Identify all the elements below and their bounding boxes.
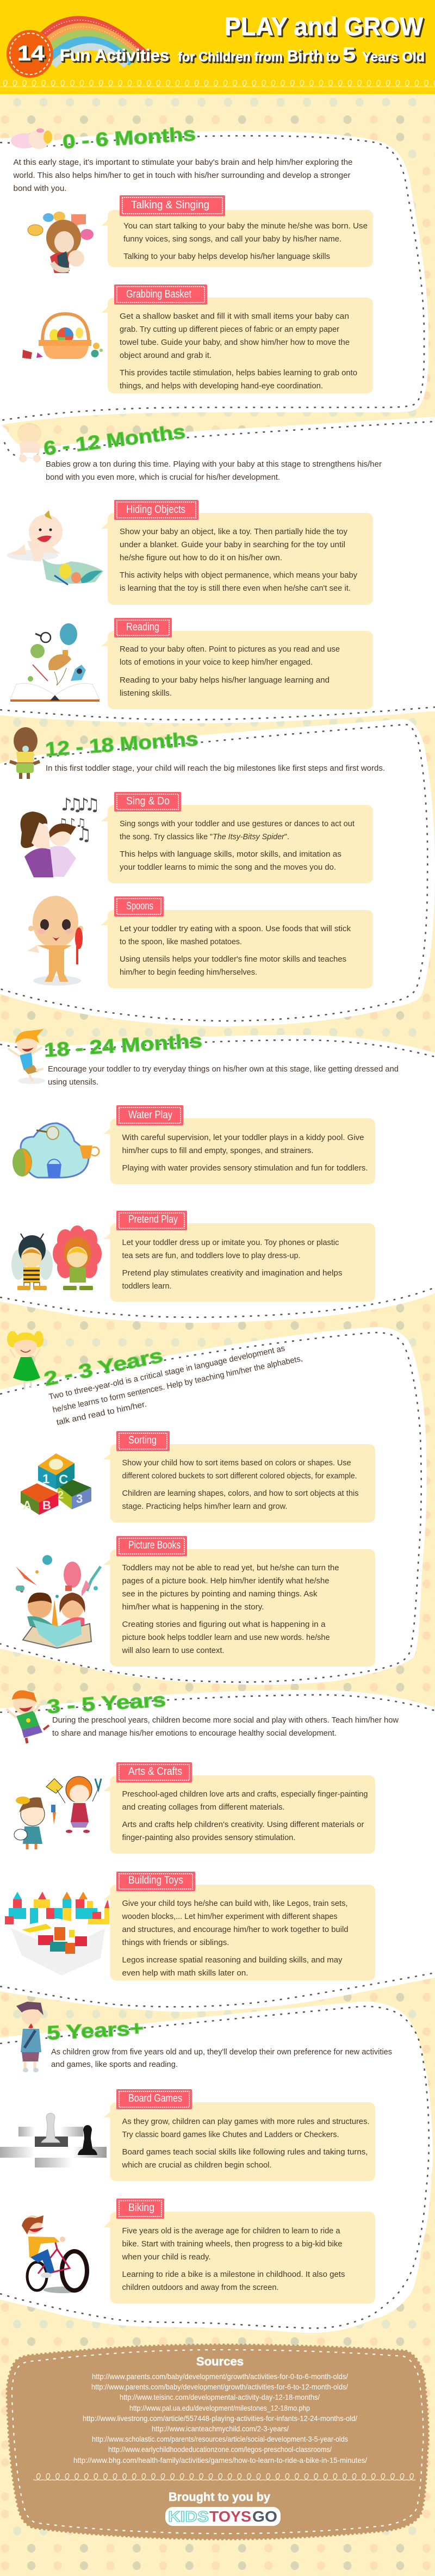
card text: and structures, and encourage him/her to work together to build bbox=[122, 1925, 348, 1934]
card text: Five years old is the average age for children to learn to ride a bbox=[122, 2226, 340, 2236]
intro text bbox=[46, 460, 382, 482]
icon: children in bee and flower costumes bbox=[11, 1225, 102, 1290]
card text bbox=[122, 1789, 368, 1842]
badge: 14 bbox=[7, 30, 53, 78]
card text bbox=[123, 221, 368, 261]
tag: Grabbing Basket bbox=[126, 288, 191, 300]
card text: wooden blocks,... Let him/her experiment with different shapes bbox=[122, 1912, 338, 1921]
card text: is learning that the toy is still there even when he/she can't see it. bbox=[120, 584, 351, 593]
card text: Board games teach social skills like following rules and taking turns, bbox=[122, 2147, 368, 2157]
source links: http://www.livestrong.com/article/557448-playing-activities-for-infants-12-24-months-old/ bbox=[83, 2414, 357, 2423]
card text: Pretend play stimulates creativity and imagination and helps bbox=[122, 1268, 343, 1278]
card: Board Games bbox=[103, 2089, 375, 2181]
logo: KidsToysGo: GO bbox=[252, 2508, 277, 2525]
source links bbox=[73, 2372, 367, 2464]
card: Arts & Crafts bbox=[103, 1762, 375, 1854]
card text: funny voices, sing songs, and call your baby by his/her name. bbox=[123, 234, 341, 244]
tag: Talking & Singing bbox=[131, 199, 209, 211]
icon: alphabet blocks: 3 bbox=[76, 1492, 83, 1506]
tag: Board Games bbox=[128, 2092, 182, 2104]
tag bbox=[120, 195, 225, 216]
intro text: Encourage your toddler to try everyday things on his/her own at this stage, like getting dressed and bbox=[48, 1064, 399, 1074]
card text: lots of emotions in your voice to keep him/her engaged. bbox=[120, 658, 313, 667]
icon: alphabet blocks: C bbox=[59, 1472, 68, 1487]
subtitle: to bbox=[326, 49, 339, 65]
subtitle: Fun Activities bbox=[60, 46, 169, 65]
card text: Reading to your baby helps his/her language learning and bbox=[120, 676, 330, 685]
intro text bbox=[48, 1064, 399, 1087]
icon: alphabet blocks: B bbox=[42, 1498, 51, 1512]
card text: your toddler learns to mimic the song and the moves you do. bbox=[120, 863, 336, 872]
card text: things with friends or siblings. bbox=[122, 1938, 229, 1947]
intro text: During the preschool years, children become more social and play with others. Teach him/her how bbox=[52, 1716, 399, 1725]
tag bbox=[116, 1105, 183, 1125]
card: Sorting bbox=[103, 1431, 375, 1522]
intro text: he/she learns to form sentences. Help by teaching him/her the alphabets, bbox=[52, 1354, 303, 1415]
heading: 2 - 3 Years: 2 - 3 Years bbox=[42, 1344, 165, 1390]
icon: mother and child singing with notes: ♫ bbox=[76, 824, 92, 845]
tag: Biking bbox=[128, 2202, 154, 2214]
icon: crawling baby with hidden toys bbox=[7, 510, 103, 585]
card text: This provides tactile stimulation, helps babies learning to grab onto bbox=[120, 368, 357, 377]
icon: alphabet blocks: 1 bbox=[42, 1472, 49, 1487]
card text: when your child is ready. bbox=[122, 2252, 211, 2262]
card text bbox=[120, 819, 355, 872]
card text: him/her cups to fill and empty, sponges, and strainers. bbox=[122, 1146, 313, 1155]
icon: mother and child singing with notes bbox=[21, 794, 100, 877]
card: Building Toys bbox=[103, 1872, 375, 1980]
source links: http://www.scholastic.com/parents/resources/article/social-development-3-5-year-olds bbox=[92, 2435, 348, 2443]
card text bbox=[122, 1563, 339, 1655]
intro text: bond with you even more, which is crucial for his/her development. bbox=[46, 473, 280, 482]
card text: Playing with water provides sensory stimulation and fun for toddlers. bbox=[122, 1163, 368, 1173]
section: 0 - 6 Months bbox=[11, 122, 373, 393]
card text: toddlers learn. bbox=[122, 1281, 172, 1291]
section: 2 - 3 Years bbox=[7, 1331, 375, 1667]
heading: 0 - 6 Months: 0 - 6 Months bbox=[62, 122, 196, 153]
section: 18 - 24 Months bbox=[8, 1029, 399, 1302]
icon: chess pieces on board bbox=[0, 2113, 107, 2168]
section: 12 - 18 Months bbox=[10, 727, 385, 988]
icon: alphabet blocks: A bbox=[23, 1498, 32, 1512]
icon: alphabet blocks: 2 bbox=[58, 1489, 64, 1501]
card text bbox=[122, 1238, 343, 1291]
icon: toddler with pacifier bbox=[10, 727, 40, 779]
card: Talking & Singing bbox=[101, 195, 373, 267]
card text: Talking to your baby helps develop his/her language skills bbox=[123, 252, 330, 261]
tag: Spoons bbox=[126, 900, 153, 912]
intro text bbox=[51, 2047, 392, 2069]
icon: sleeping baby bbox=[11, 128, 52, 149]
heading: 12 - 18 Months: 12 - 18 Months bbox=[45, 727, 199, 760]
intro text: talk and read to him/her. bbox=[55, 1400, 147, 1427]
tag bbox=[116, 2199, 164, 2219]
card: Sing & Do bbox=[101, 792, 373, 883]
subtitle: Birth bbox=[287, 47, 323, 65]
icon: baby holding spoon bbox=[27, 896, 83, 986]
intro text bbox=[52, 1716, 399, 1738]
card text bbox=[120, 527, 357, 593]
tag: Sorting bbox=[128, 1434, 157, 1446]
card text: Give your child toys he/she can build with, like Legos, train sets, bbox=[122, 1899, 348, 1908]
icon: boy with shoulder bag bbox=[16, 2002, 44, 2072]
icon: open book with adventures bbox=[10, 623, 100, 702]
card text bbox=[120, 645, 340, 698]
card: Grabbing Basket bbox=[101, 284, 373, 393]
card text: him/her to begin feeding him/herselves. bbox=[120, 968, 257, 977]
tag: Reading bbox=[126, 621, 159, 633]
icon: boy on a bike bbox=[22, 2215, 87, 2293]
card text: things, and helps with developing hand-eye coordination. bbox=[120, 381, 323, 391]
card text: grab. Try cutting up different pieces of fabric or an empty paper bbox=[120, 325, 339, 334]
intro text: At this early stage, it's important to stimulate your baby's brain and help him/her exploring the bbox=[13, 158, 352, 167]
source links: http://www.parents.com/baby/development/growth/activities-for-0-to-6-month-olds/ bbox=[92, 2372, 348, 2381]
card: Spoons bbox=[101, 896, 373, 988]
source links: http://www.bhg.com/health-family/activities/games/how-to-learn-to-ride-a-bike-in-15-minutes/ bbox=[73, 2456, 367, 2464]
title: PLAY and GROW bbox=[225, 12, 424, 41]
card text: Learning to ride a bike is a milestone in childhood. It also gets bbox=[122, 2270, 345, 2279]
card text: Try classic board games like Chutes and Ladders or Checkers. bbox=[122, 2130, 339, 2139]
heading: 18 - 24 Months: 18 - 24 Months bbox=[44, 1029, 203, 1061]
badge: 14: 14 bbox=[17, 42, 45, 65]
card text bbox=[122, 2226, 345, 2292]
intro text: bond with you. bbox=[13, 184, 66, 193]
card text: This helps with language skills, motor skills, and imitation as bbox=[120, 850, 341, 859]
card text bbox=[122, 1458, 359, 1511]
card text: Children are learning shapes, colors, and how to sort objects at this bbox=[122, 1489, 359, 1498]
icon: children doing arts and crafts bbox=[14, 1776, 101, 1849]
card text: him/her what is happening in the story. bbox=[122, 1602, 264, 1612]
card text: stage. Practicing helps him/her learn and grow. bbox=[122, 1502, 287, 1511]
header banner bbox=[0, 0, 435, 94]
tag bbox=[114, 896, 164, 917]
icon: girl with pigtails bbox=[7, 1331, 44, 1390]
card text: even help with math skills later on. bbox=[122, 1968, 248, 1978]
icon: mother and child singing with notes: ♫♪♫ bbox=[57, 816, 86, 830]
card: Hiding Objects bbox=[101, 500, 373, 605]
tag bbox=[116, 2089, 192, 2109]
card text: As they grow, children can play games with more rules and structures. bbox=[122, 2117, 370, 2126]
heading: 5 Years+: 5 Years+ bbox=[46, 2017, 144, 2044]
section: 3 - 5 Years bbox=[5, 1688, 399, 1980]
tag bbox=[116, 1536, 187, 1556]
card text: see in the pictures by pointing and naming things. Ask bbox=[122, 1589, 318, 1599]
credit: Brought to you by: Brought to you by bbox=[169, 2490, 271, 2504]
card text: Let your toddler dress up or imitate you. Toy phones or plastic bbox=[122, 1238, 339, 1247]
card text: Let your toddler try eating with a spoon. Use foods that will stick bbox=[120, 924, 351, 933]
card text: finger-painting also provides sensory stimulation. bbox=[122, 1833, 296, 1842]
icon: grabbing basket bbox=[22, 314, 103, 359]
card text: towel tube. Guide your baby, and show him/her how to move the bbox=[120, 338, 350, 347]
card text: the song. Try classics like "The Itsy-Bitsy Spider". bbox=[120, 832, 289, 841]
card text: bike. Start with training wheels, then progress to a big-kid bike bbox=[122, 2239, 343, 2249]
tag: Pretend Play bbox=[128, 1213, 178, 1225]
tag: Hiding Objects bbox=[126, 504, 185, 516]
source links: http://www.icanteachmychild.com/2-3-years/ bbox=[152, 2424, 289, 2433]
tag bbox=[114, 618, 172, 637]
card text: Toddlers may not be able to read yet, but he/she can turn the bbox=[122, 1563, 339, 1572]
card text bbox=[120, 312, 357, 391]
logo: KidsToysGo: TOYS bbox=[209, 2508, 251, 2525]
card text: pages of a picture book. Help him/her identify what he/she bbox=[122, 1576, 330, 1586]
card text bbox=[122, 1899, 349, 1978]
tag bbox=[116, 1211, 187, 1230]
card text: different colored buckets to sort different colored objects, for example. bbox=[122, 1471, 357, 1481]
tag: Water Play bbox=[128, 1109, 172, 1121]
intro text: As children grow from five years old and up, they'll develop their own preference for new activities bbox=[51, 2047, 392, 2057]
intro text: using utensils. bbox=[48, 1078, 98, 1087]
card text: Creating stories and figuring out what is happening in a bbox=[122, 1620, 326, 1629]
tag bbox=[116, 1872, 195, 1891]
card text bbox=[122, 1133, 368, 1173]
card text: Arts and crafts help children's creativity. Using different materials or bbox=[122, 1820, 364, 1829]
card text: Legos increase spatial reasoning and building skills, and may bbox=[122, 1955, 343, 1965]
intro text: Two to three-year-old is a critical stage in language development as bbox=[48, 1343, 286, 1402]
card text: picture book helps toddler learn and use new words. he/she bbox=[122, 1633, 330, 1642]
section: 6 - 12 Months bbox=[7, 420, 382, 709]
card text: under a blanket. Guide your baby in searching for the toy until bbox=[120, 540, 345, 549]
card text bbox=[120, 924, 351, 977]
decorative loop line bbox=[33, 2472, 415, 2482]
card text: Get a shallow basket and fill it with small items your baby can bbox=[120, 312, 349, 321]
source links: http://www.parents.com/baby/development/growth/activities-for-6-to-12-month-olds/ bbox=[91, 2382, 348, 2391]
source links: http://www.pal.ua.edu/development/milestones_12-18mo.php bbox=[129, 2404, 310, 2412]
icon: laughing red-haired boy bbox=[7, 1691, 49, 1743]
icon: kiddy pool bbox=[13, 1123, 99, 1178]
tag bbox=[116, 1431, 170, 1451]
icon: mother and child singing with notes: ♪♫♪♫ bbox=[61, 794, 100, 815]
decorative loop line bbox=[0, 78, 435, 89]
card text: Sing songs with your toddler and use gestures or dances to act out bbox=[120, 819, 355, 828]
card text: Read to your baby often. Point to pictures as you read and use bbox=[120, 645, 340, 654]
card: Pretend Play bbox=[103, 1211, 375, 1302]
tag bbox=[114, 792, 181, 812]
card text: Using utensils helps your toddler's fine motor skills and teaches bbox=[120, 955, 346, 964]
tag: Sing & Do bbox=[126, 795, 170, 807]
intro text: and games, like sports and reading. bbox=[51, 2060, 178, 2069]
card: Water Play bbox=[103, 1105, 375, 1184]
intro text: to share and manage his/her emotions to encourage healthy social development. bbox=[52, 1729, 337, 1738]
subtitle: for Children from bbox=[178, 49, 283, 65]
icon: children reading a picture book bbox=[16, 1555, 101, 1648]
card text: Preschool-aged children love arts and crafts, especially finger-painting bbox=[122, 1789, 368, 1799]
card: Reading bbox=[101, 618, 373, 709]
icon: jumping boy bbox=[8, 1029, 45, 1084]
card text: children outdoors and away from the screen. bbox=[122, 2283, 278, 2292]
tag: Arts & Crafts bbox=[128, 1766, 182, 1778]
intro text: Babies grow a ton during this time. Playing with your baby at this stage to strengthens his/her bbox=[46, 460, 382, 469]
card text: to the spoon, like mashed potatoes. bbox=[120, 937, 242, 946]
card text: he/she figure out how to do it on his/her own. bbox=[120, 553, 282, 562]
icon: building blocks bbox=[5, 1892, 109, 1976]
subtitle: Years Old bbox=[362, 49, 425, 65]
heading: Sources: Sources bbox=[196, 2355, 244, 2368]
card text: will also learn to use context. bbox=[122, 1646, 224, 1655]
intro text: world. This also helps him/her to get in touch with his/her surrounding and develop a stronger bbox=[13, 171, 351, 180]
intro text bbox=[13, 158, 352, 193]
card text: tea sets are fun, and toddlers love to play dress-up. bbox=[122, 1251, 300, 1260]
tag bbox=[114, 284, 207, 305]
card text: which are crucial as children begin school. bbox=[122, 2160, 272, 2170]
icon: alphabet blocks bbox=[21, 1453, 91, 1515]
heading: 3 - 5 Years: 3 - 5 Years bbox=[46, 1688, 166, 1718]
intro text: In this first toddler stage, your child will reach the big milestones like first steps and first words. bbox=[46, 764, 385, 773]
card: Biking bbox=[103, 2199, 375, 2303]
card text: Show your baby an object, like a toy. Then partially hide the toy bbox=[120, 527, 347, 536]
panel: sources and credits bbox=[7, 2345, 428, 2539]
card: Picture Books bbox=[103, 1536, 375, 1667]
subtitle: 5 bbox=[343, 44, 356, 65]
heading: 6 - 12 Months: 6 - 12 Months bbox=[42, 420, 187, 460]
tag: Picture Books bbox=[128, 1539, 181, 1551]
card text: With careful supervision, let your toddler plays in a kiddy pool. Give bbox=[122, 1133, 364, 1142]
logo: KidsToysGo: KIDS bbox=[168, 2508, 209, 2525]
card text: You can start talking to your baby the minute he/she was born. Use bbox=[123, 221, 368, 231]
source links: http://www.teisinc.com/developmental-activity-day-12-18-months/ bbox=[120, 2393, 320, 2401]
card text: This activity helps with object permanence, which means your baby bbox=[120, 571, 357, 580]
icon: mother talking to baby bbox=[28, 212, 94, 273]
section: 5 Years+ bbox=[0, 2002, 392, 2303]
card text: listening skills. bbox=[120, 689, 172, 698]
tag: Building Toys bbox=[128, 1874, 183, 1886]
rainbow bbox=[39, 20, 148, 65]
icon: baby in diaper bbox=[17, 423, 41, 462]
card text: object around and grab it. bbox=[120, 351, 212, 360]
card text: and creating collages from different materials. bbox=[122, 1803, 285, 1812]
source links: http://www.earlychildhoodeducationzone.com/legos-preschool-classrooms/ bbox=[108, 2445, 332, 2454]
card text bbox=[122, 2117, 370, 2170]
subtitle bbox=[60, 44, 425, 65]
tag bbox=[116, 1762, 192, 1782]
logo: KidsToysGo bbox=[165, 2507, 281, 2526]
tag bbox=[114, 500, 198, 520]
card text: Show your child how to sort items based on colors or shapes. Use bbox=[122, 1458, 351, 1467]
